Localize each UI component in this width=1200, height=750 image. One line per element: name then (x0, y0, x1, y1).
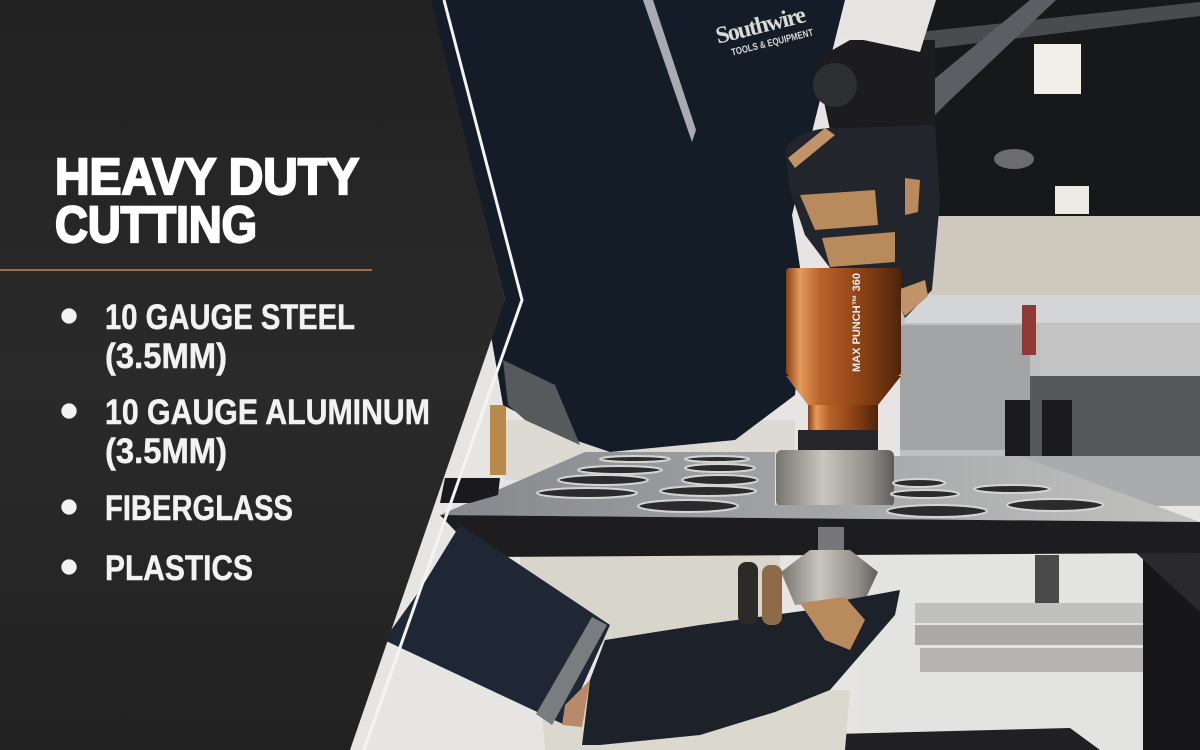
panel: dark text panel (0, 0, 522, 750)
title: HEAVY DUTY (55, 148, 359, 205)
logo: Southwire tools and equipment: Southwire (713, 2, 809, 50)
logo: Southwire tools and equipment: TOOLS & EQUIPMENT (730, 28, 814, 59)
chevron: white outline (364, 0, 522, 750)
photo: copper Max Punch 360 cylinder (786, 268, 901, 455)
photo: steel punch die (776, 450, 894, 507)
list item: 10 gauge steel (62, 298, 355, 376)
list item: fiberglass (62, 489, 293, 528)
list item: 10 gauge steel: (3.5MM) (105, 337, 227, 376)
list item: plastics (62, 549, 253, 588)
list item: 10 gauge aluminum: 10 GAUGE ALUMINUM (105, 393, 430, 432)
photo: perforated metal plate (440, 452, 1200, 557)
divider: copper rule (0, 269, 372, 271)
list item: 10 gauge steel: 10 GAUGE STEEL (105, 298, 355, 337)
photo: copper Max Punch 360 cylinder: MAX PUNCH™ 360 (851, 273, 863, 372)
photo: worker torso in navy quarter-zip (430, 0, 845, 452)
list item: 10 gauge aluminum: (3.5MM) (105, 432, 227, 471)
list item: plastics: PLASTICS (105, 549, 253, 588)
bullet list (62, 298, 430, 588)
photo: workshop background (340, 0, 1200, 750)
title: CUTTING (55, 196, 257, 253)
title (55, 148, 359, 253)
photo: hydraulic punch handle (813, 0, 1056, 130)
photo: lower die and threaded stud (781, 527, 878, 605)
list item: 10 gauge aluminum (62, 393, 430, 471)
list item: fiberglass: FIBERGLASS (105, 489, 293, 528)
photo: black bracket under panel edge (440, 478, 500, 503)
photo: upper gloved hand (785, 125, 940, 318)
photo: lower arm and gloved hand (384, 525, 900, 745)
